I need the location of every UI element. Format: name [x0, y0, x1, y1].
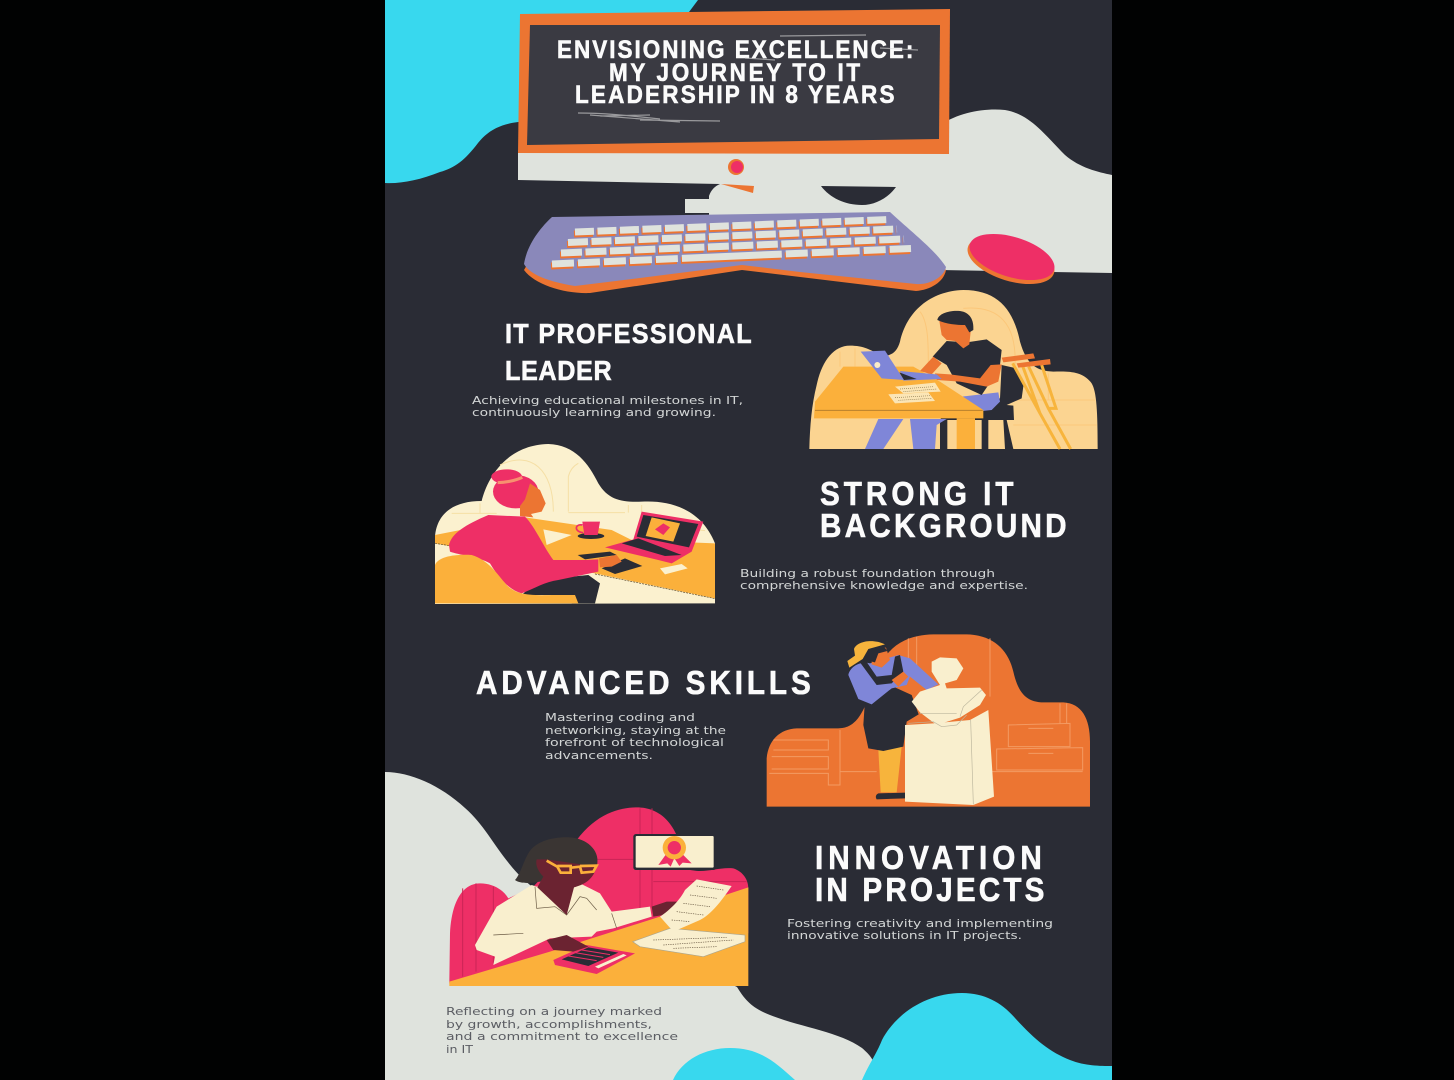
apron bib [860, 655, 903, 685]
shirt [933, 339, 1002, 395]
section 1 heading: IT PROFESSIONAL [505, 318, 752, 349]
keyboard [524, 212, 946, 293]
closing text: by growth, accomplishments, [446, 1018, 652, 1031]
pedestal [905, 710, 994, 805]
closing text: Reflecting on a journey marked [446, 1005, 662, 1018]
head [491, 469, 546, 517]
cyan blob top left [385, 0, 698, 183]
paper stack [633, 928, 745, 957]
section 2 heading: STRONG IT [820, 476, 1014, 512]
certificate [633, 834, 716, 870]
section 3 text: Mastering coding and [545, 711, 695, 724]
closing text: in IT [446, 1043, 473, 1056]
section 2 text: Building a robust foundation through [740, 567, 995, 580]
mouse [962, 225, 1060, 293]
paper [543, 529, 572, 545]
sweater [449, 515, 598, 593]
face and neck [536, 859, 597, 915]
arms [920, 357, 1002, 387]
illustration: sculptor with bust [767, 634, 1090, 807]
cyan blob bottom right [862, 993, 1112, 1080]
neck and head [939, 321, 971, 348]
hair [515, 837, 598, 887]
papers [888, 383, 941, 403]
section 1 text: continuously learning and growing. [472, 406, 716, 419]
laptop [605, 512, 703, 563]
hand and pen [599, 555, 622, 567]
shirt [475, 883, 652, 965]
section 2 text [740, 567, 1028, 592]
calculator [553, 945, 635, 974]
laptop [861, 351, 942, 381]
section 3 text [545, 711, 726, 762]
poster background [385, 0, 1112, 1080]
section 2 heading: BACKGROUND [820, 508, 1067, 544]
closing text: and a commitment to excellence [446, 1030, 678, 1043]
illustration: designer at laptop [435, 444, 715, 604]
desk [435, 517, 715, 598]
title: LEADERSHIP IN 8 YEARS [575, 81, 895, 109]
section 1 text: Achieving educational milestones in IT, [472, 394, 743, 407]
section 1 text [472, 394, 743, 419]
section 4 text: Fostering creativity and implementing [787, 917, 1053, 930]
pink backdrop [449, 807, 748, 983]
section 4 heading [815, 840, 1044, 908]
section 3 text: forefront of technological [545, 736, 724, 749]
power button [728, 159, 744, 175]
cyan blob bottom centre [673, 1048, 795, 1080]
crutches [1002, 353, 1071, 449]
held paper [660, 879, 732, 932]
illustration: woman with documents [449, 807, 748, 986]
section 2 heading [820, 476, 1067, 544]
keys [551, 220, 911, 266]
gray blob bottom left [385, 772, 880, 1080]
table [449, 887, 748, 986]
section 4 text [787, 917, 1053, 942]
head [872, 648, 890, 668]
title: MY JOURNEY TO IT [609, 59, 861, 87]
apron [863, 680, 919, 751]
trousers [522, 575, 600, 603]
stand notch [821, 186, 896, 205]
illustration: person at laptop with crutches [809, 290, 1098, 449]
monitor stand [518, 150, 949, 270]
section 4 heading: IN PROJECTS [815, 872, 1045, 908]
chair [435, 555, 578, 603]
section 2 text: comprehensive knowledge and expertise. [740, 579, 1028, 592]
section 3 heading: ADVANCED SKILLS [476, 665, 811, 701]
section 1 heading [505, 318, 752, 386]
title [557, 36, 913, 109]
hands [547, 902, 678, 952]
mouse [660, 564, 688, 574]
gray blob top right [940, 110, 1112, 273]
orange wedge [721, 184, 754, 193]
section 3 text: advancements. [545, 749, 653, 762]
monitor screen [527, 25, 940, 145]
table [814, 367, 983, 418]
monitor frame [518, 9, 950, 154]
shirt [848, 655, 938, 704]
closing text [446, 1005, 678, 1056]
section 1 heading: LEADER [505, 355, 612, 386]
shoe [876, 793, 905, 799]
hand and chisel [892, 672, 908, 687]
cup [576, 522, 604, 539]
title: ENVISIONING EXCELLENCE: [557, 36, 913, 64]
section 3 text: networking, staying at the [545, 724, 726, 737]
section 4 heading: INNOVATION [815, 840, 1042, 876]
table leg [957, 418, 975, 449]
bandana [847, 641, 885, 668]
chalk scratch [578, 35, 918, 122]
section 4 text: innovative solutions in IT projects. [787, 929, 1022, 942]
glasses [547, 861, 597, 873]
tablet and keyboard [578, 552, 642, 574]
computer monitor illustration [518, 9, 1060, 293]
legs [865, 392, 1000, 449]
bust [912, 657, 986, 725]
yellow leg [878, 747, 902, 792]
chair [940, 365, 1024, 449]
